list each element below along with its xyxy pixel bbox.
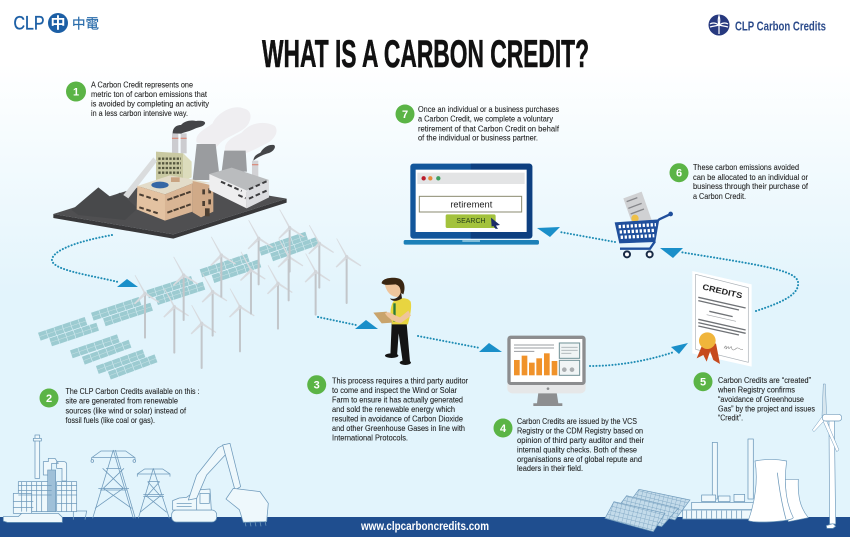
step 2 [40,386,200,425]
arrow: auditor to monitor [418,336,502,352]
text 5: “avoidance of Greenhouse [718,394,804,404]
illustration: credits certificate: CREDITS [702,283,744,301]
text 2 [66,386,200,425]
cooling towers [748,459,808,522]
logo: CLP: 中電 [72,16,99,32]
skyline: solar panels, power plant, cooling towers and wind turbine [605,384,842,532]
text 2: sources (like wind or solar) instead of [66,405,187,415]
logo: CLP [14,13,99,34]
badge 2 [40,388,58,408]
badge 5: 5 [700,377,706,389]
badge 7: 7 [402,109,408,121]
illustration: computer monitor with chart [507,336,586,406]
small pylon [137,468,170,518]
text 1: metric ton of carbon emissions that [91,89,208,99]
text 1: A Carbon Credit represents one [91,80,193,90]
text 5: Gas” by the project and issues [718,403,815,413]
illustration: shopping cart with credit paper [615,192,673,257]
illustration: factory [53,107,287,239]
arrow: monitor to certificate [590,343,688,366]
badge 3 [307,375,326,394]
badge 2: 2 [46,393,52,405]
solar panels [605,489,690,532]
logo: CLP: 中 [50,15,66,32]
arrow: certificate to cart [660,248,798,311]
illustration: laptop search: SEARCH [456,218,486,225]
step 3 [307,375,468,443]
illustration: laptop search [404,164,539,245]
text 3: to come and inspect the Wind or Solar [332,385,457,395]
text 4: leaders in their field. [517,463,583,473]
text 2: fossil fuels (like coal or gas). [66,415,155,425]
step 4 [494,416,644,473]
badge 3: 3 [314,380,320,392]
step 6 [670,162,809,201]
step 5 [694,372,815,423]
text 4: internal quality checks. Both of these [517,445,637,455]
solar panel rows [39,236,317,376]
text 6: business through their purchase of [693,181,809,191]
text 5: Carbon Credits are “created” [718,375,811,385]
arrow: factory to wind farm [52,235,138,287]
stacks [712,439,753,499]
text 7 [418,104,560,143]
text 2: site are generated from renewable [66,396,178,406]
badge 6: 6 [676,168,682,180]
text 7: retirement of that Carbon Credit on behalf [418,123,560,133]
text 7: of the individual or business partner. [418,133,538,143]
text 3: Farm to ensure it has actually generated [332,395,463,405]
text 4: opinion of third party auditor and their [517,435,644,445]
text 6: a Carbon Credit. [693,191,746,201]
text 6: These carbon emissions avoided [693,162,799,172]
badge 7 [396,104,414,124]
skyline: refinery, pylons and excavator [3,435,268,526]
logo: CLP Carbon Credits [708,14,826,36]
text 5: “Credit”. [718,413,743,423]
power plant [683,494,755,519]
badge 1 [66,82,86,102]
badge 1: 1 [73,86,79,98]
illustration: auditor [373,278,411,365]
text 3 [332,376,468,443]
wind turbine [812,384,842,528]
footer band: www.clpcarboncredits.com [360,521,489,533]
large pylon [91,450,136,518]
footer band [0,517,850,537]
text 1: in a less carbon intensive way. [91,108,188,118]
text 5: when Registry confirms [717,384,795,394]
step 1 [66,80,210,118]
text 6 [693,162,809,201]
text 7: Once an individual or a business purchases [418,104,559,114]
wind turbines [134,209,361,368]
text 3: and other Greenhouse Gases in line with [332,423,465,433]
text 2: The CLP Carbon Credits available on this : [66,386,200,396]
step 7 [396,104,560,143]
text 3: This process requires a third party auditor [332,376,468,386]
excavator [172,443,268,526]
text 1 [91,80,210,118]
title: WHAT IS A CARBON CREDIT? [262,33,589,76]
text 6: can be allocated to an individual or [693,172,808,182]
logo: CLP: CLP [14,14,44,34]
text 4: Carbon Credits are issued by the VCS [517,416,637,426]
illustration: credits certificate [692,271,752,367]
arrow: wind farm to auditor [318,317,378,329]
text 7: a Carbon Credit, we complete a voluntary [418,114,554,124]
text 4: organisations are of global repute and [517,454,642,464]
illustration: laptop search: retirement [450,200,493,210]
text 3: resulted in avoidance of Carbon Dioxide [332,414,463,424]
badge 4 [494,418,512,438]
arrow: cart to laptop [537,227,615,242]
text 4 [517,416,644,473]
badge 4: 4 [500,423,507,435]
text 4: Registry or the CDM Registry based on [517,426,643,436]
logo: CLP Carbon Credits: CLP Carbon Credits [735,20,826,34]
refinery [3,435,87,522]
text 3: and sold the renewable energy which [332,404,455,414]
text 3: International Protocols. [332,433,408,443]
text 5 [717,375,815,423]
illustration: solar panels and wind farm [39,209,361,376]
text 1: is avoided by completing an activity [91,98,210,108]
